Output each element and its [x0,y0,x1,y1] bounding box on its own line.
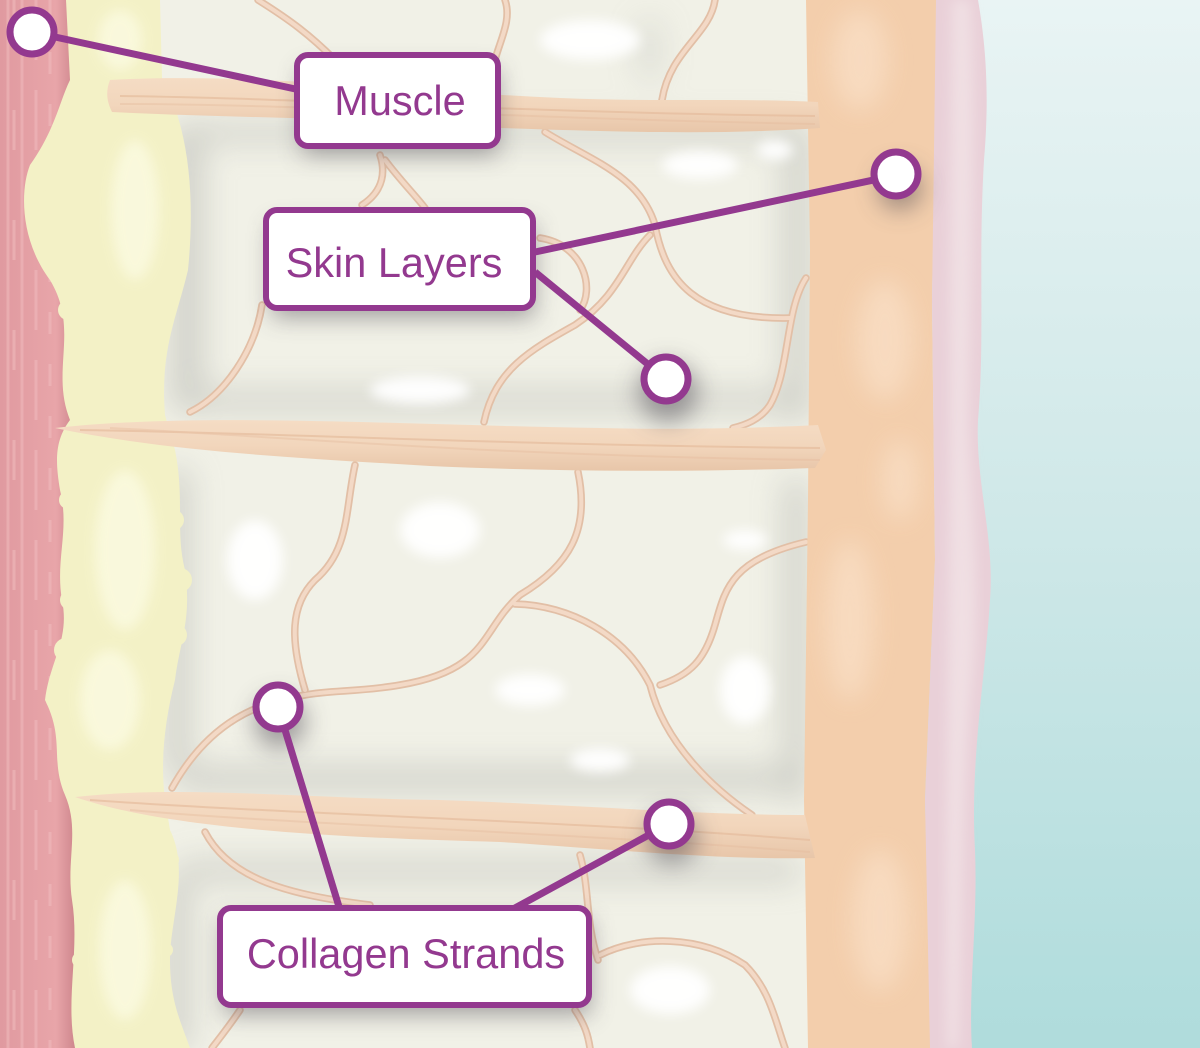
collagen strands [172,0,806,1048]
label: Muscle: Muscle [334,77,466,124]
illustration: subcutaneous cell layer [150,0,820,1048]
marker: collagen left [256,685,300,729]
label: Collagen Strands: Collagen Strands [247,930,565,977]
dermis texture [826,10,918,990]
label: Skin Layers [266,210,533,308]
label: Collagen Strands [220,908,589,1005]
muscle layer [0,0,80,1048]
marker: collagen right [647,802,691,846]
leader shadows [224,70,922,1014]
dermis layer [804,0,938,1048]
marker: muscle [10,10,54,54]
marker: skin layers outer [874,152,918,196]
epidermis layer [925,0,991,1048]
marker: skin layers inner [644,357,688,401]
connective bands [55,78,826,858]
label: Muscle [297,55,498,146]
leader lines [32,32,897,910]
fat layer [24,0,192,1048]
label: Skin Layers: Skin Layers [286,239,502,286]
